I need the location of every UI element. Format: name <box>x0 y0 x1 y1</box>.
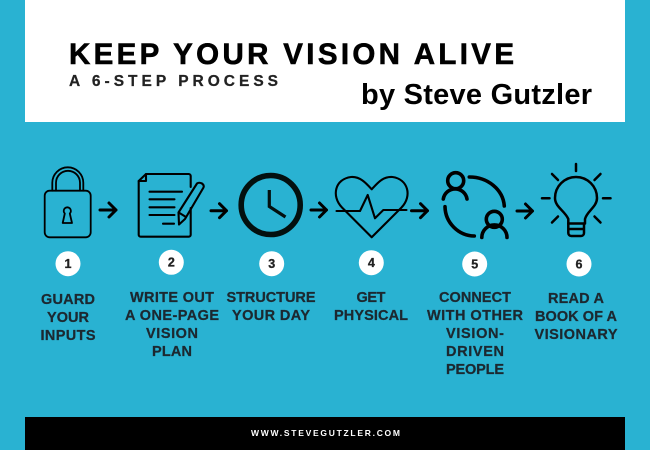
step 5 label: VISION- <box>446 326 504 342</box>
step 1 label <box>40 292 96 344</box>
step 4 label: PHYSICAL <box>334 308 408 324</box>
icon: light bulb <box>542 164 610 236</box>
title: KEEP YOUR VISION ALIVE <box>69 38 514 71</box>
step 5 label <box>427 290 524 378</box>
step 6 label: VISIONARY <box>534 327 618 343</box>
step number 2 <box>159 250 184 275</box>
arrow 5 <box>517 204 532 218</box>
step 1 label: INPUTS <box>40 328 96 344</box>
step number 3 <box>259 251 284 276</box>
step 1 label: YOUR <box>47 310 90 326</box>
step 2 label: PLAN <box>152 344 192 360</box>
icon: connected people <box>443 173 507 238</box>
step number 1: 1 <box>65 257 72 271</box>
step 4 label: GET <box>356 290 386 306</box>
arrow 1 <box>100 203 116 217</box>
footer bar <box>25 417 625 450</box>
step 6 label <box>534 291 618 343</box>
subtitle: A 6-STEP PROCESS <box>69 73 278 90</box>
icon: document with pen <box>139 174 204 237</box>
step 3 label: YOUR DAY <box>232 308 310 324</box>
arrow 2 <box>211 204 226 218</box>
step 5 label: CONNECT <box>439 290 511 306</box>
step 2 label: A ONE-PAGE <box>125 308 219 324</box>
step number 2: 2 <box>168 256 175 270</box>
icon: clock <box>241 176 300 234</box>
step 5 label: PEOPLE <box>446 362 504 378</box>
step 2 label <box>125 290 219 360</box>
website url: WWW.STEVEGUTZLER.COM <box>251 428 400 438</box>
step 6 label: BOOK OF A <box>535 309 618 325</box>
step number 5 <box>462 252 487 276</box>
header panel <box>25 0 625 122</box>
icon: heart with pulse <box>336 177 408 237</box>
step number 6 <box>566 252 592 276</box>
arrow 4 <box>412 204 428 218</box>
step 6 label: READ A <box>548 291 605 307</box>
step 1 label: GUARD <box>41 292 95 308</box>
step 3 label <box>226 290 316 324</box>
step 4 label <box>334 290 408 324</box>
step 2 label: VISION <box>146 326 198 342</box>
step 5 label: WITH OTHER <box>427 308 524 324</box>
step 2 label: WRITE OUT <box>130 290 214 306</box>
arrow 3 <box>311 203 326 217</box>
step 3 label: STRUCTURE <box>226 290 316 306</box>
step number 1 <box>56 251 80 276</box>
step number 4: 4 <box>368 256 375 270</box>
author byline: by Steve Gutzler <box>361 79 592 111</box>
step number 6: 6 <box>576 257 583 271</box>
step number 5: 5 <box>471 257 478 271</box>
step number 4 <box>359 250 384 275</box>
step 5 label: DRIVEN <box>446 344 504 360</box>
icon: padlock <box>45 167 91 237</box>
step number 3: 3 <box>268 257 275 271</box>
